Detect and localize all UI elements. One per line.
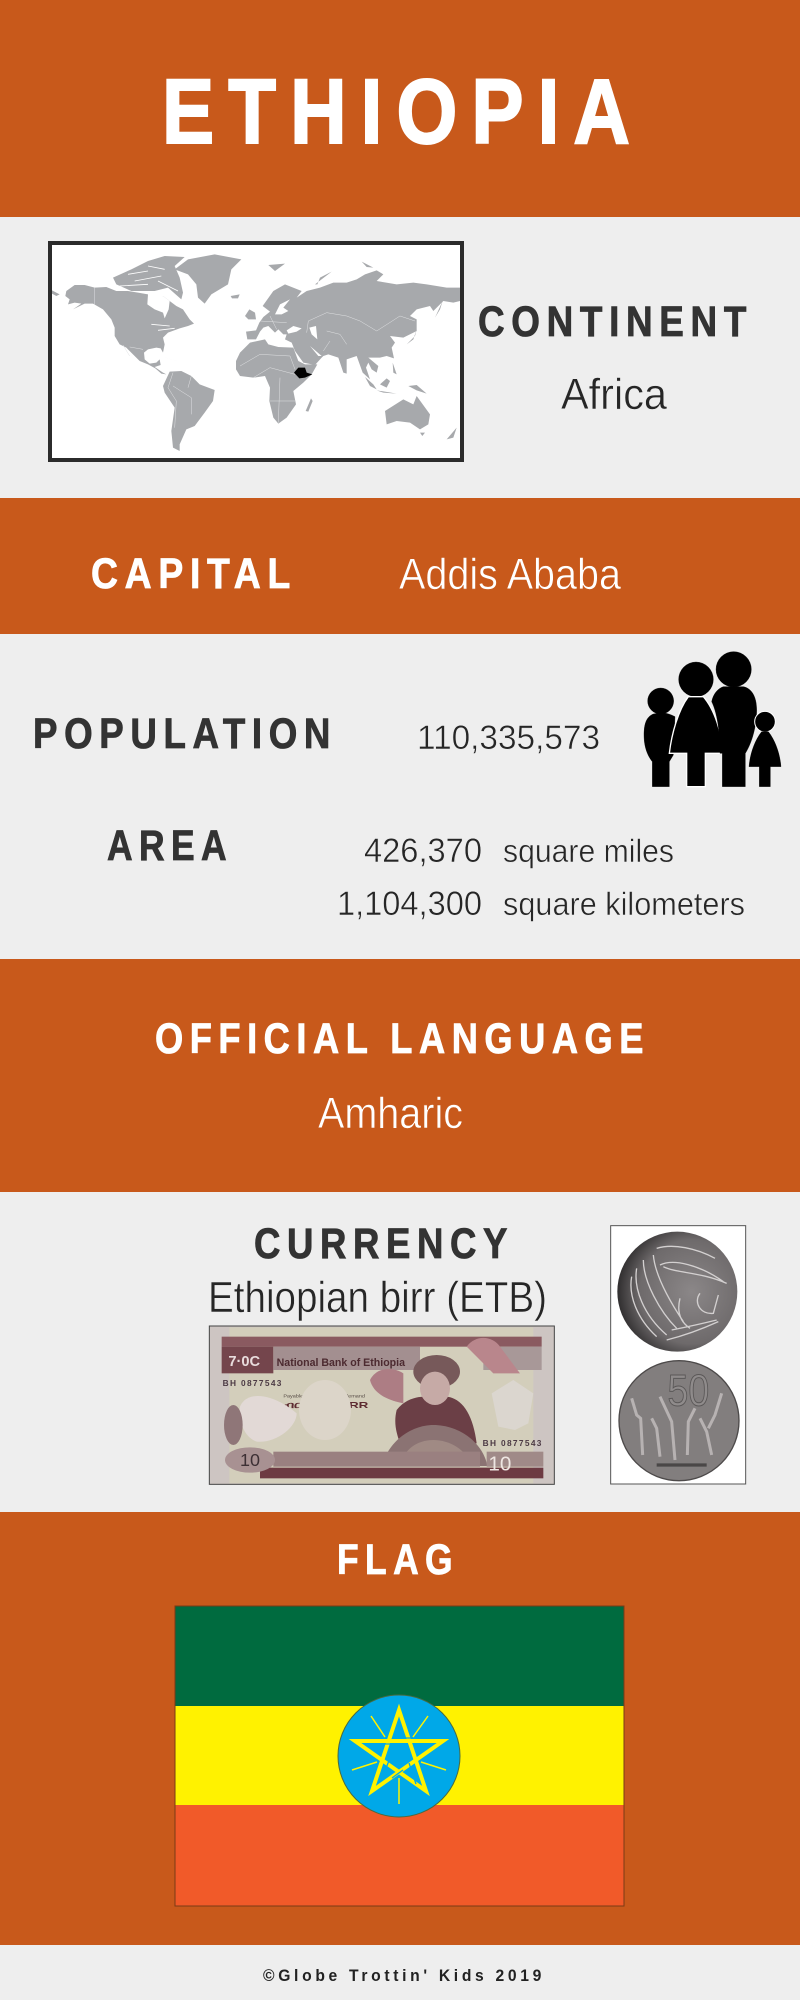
panel: official language	[0, 959, 800, 1192]
banknote	[209, 1326, 554, 1484]
banknote: BH 0877543	[223, 1378, 283, 1388]
value: square kilometers	[337, 885, 745, 923]
value: square miles: square miles	[503, 833, 674, 869]
heading: flag: FLAG	[337, 1536, 459, 1584]
value: Amharic: Amharic	[318, 1089, 463, 1138]
banknote: 7·0C	[228, 1354, 261, 1370]
panel: population and area	[0, 634, 800, 959]
value: square kilometers: square kilometers	[503, 886, 745, 922]
panel: currency	[0, 1192, 800, 1512]
value: Africa: Africa	[561, 370, 667, 419]
value: square miles: 426,370	[364, 832, 482, 870]
coin: lion	[617, 1232, 737, 1352]
banknote: 10	[488, 1453, 511, 1476]
heading: area: AREA	[107, 822, 233, 870]
panel: capital	[0, 498, 800, 634]
heading: population: POPULATION	[33, 710, 337, 758]
panel: footer	[0, 1945, 800, 2000]
heading: capital: CAPITAL	[91, 550, 297, 598]
banknote: BH 0877543	[483, 1438, 543, 1448]
heading: currency: CURRENCY	[254, 1220, 514, 1268]
icon: family	[644, 652, 781, 787]
coin: fifty: 50	[667, 1367, 709, 1416]
title: ETHIOPIA	[162, 61, 644, 163]
banknote: National Bank of Ethiopia	[277, 1357, 406, 1369]
value: square kilometers: 1,104,300	[337, 885, 482, 923]
heading: continent: CONTINENT	[478, 298, 753, 346]
value: population: 110,335,573	[417, 719, 600, 757]
banknote: Payable to the bearer on demand	[283, 1393, 365, 1399]
value: Ethiopian birr: Ethiopian birr (ETB)	[208, 1273, 547, 1322]
heading: official language: OFFICIAL LANGUAGE	[155, 1015, 650, 1063]
banknote: ብር TEN BIRR	[283, 1400, 368, 1410]
coins	[611, 1226, 746, 1484]
flag emblem	[338, 1695, 460, 1817]
value: square miles	[364, 832, 674, 870]
banknote: 10	[240, 1450, 260, 1470]
flag of Ethiopia	[175, 1606, 624, 1906]
credit: ©Globe Trottin' Kids 2019	[263, 1966, 545, 1985]
coin: fifty	[619, 1361, 739, 1481]
world map	[50, 243, 462, 460]
panel: continent	[0, 217, 800, 498]
panel: title band	[0, 0, 800, 217]
Ethiopia marker	[294, 368, 312, 378]
value: Addis Ababa: Addis Ababa	[399, 550, 621, 599]
panel: flag	[0, 1512, 800, 1945]
